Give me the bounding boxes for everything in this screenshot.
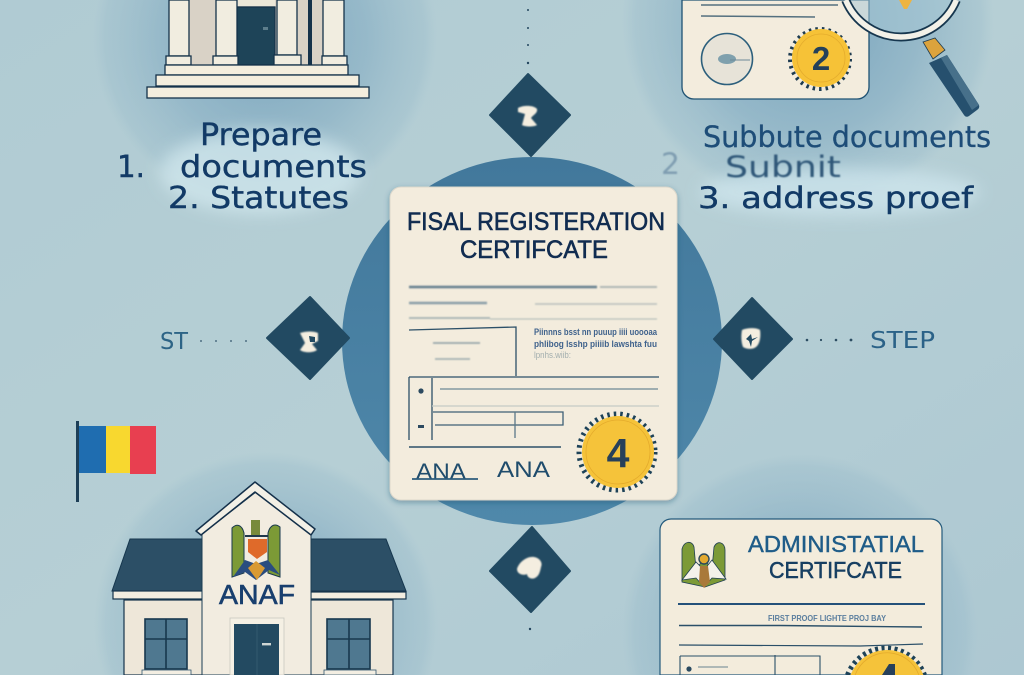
windows bbox=[145, 619, 370, 669]
text: left list bbox=[117, 118, 367, 216]
certificate form bullets bbox=[418, 388, 424, 428]
central gable block bbox=[202, 492, 311, 675]
label: STEP right: STEP bbox=[870, 328, 935, 354]
administrative certificate bbox=[660, 519, 942, 675]
Romanian flag bbox=[76, 421, 156, 502]
emblem bbox=[682, 542, 726, 588]
bottom connector dot bbox=[529, 628, 531, 630]
label: ST left: ST bbox=[160, 329, 189, 355]
courthouse illustration bbox=[147, 0, 369, 98]
certificate body lines bbox=[409, 287, 657, 359]
text: right list: Subnit bbox=[725, 150, 841, 184]
certificate seal number 4: 4 bbox=[607, 430, 630, 476]
text: left list: Prepare bbox=[200, 118, 322, 153]
title: CERTIFCATE bbox=[769, 557, 902, 583]
certificate title: FISAL REGISTERATION bbox=[407, 208, 665, 236]
gable roof bbox=[196, 482, 315, 535]
window sills bbox=[142, 670, 376, 675]
certificate title bbox=[407, 208, 665, 264]
diamond: right bbox=[714, 298, 792, 379]
title bbox=[748, 531, 924, 583]
form bullet bbox=[686, 666, 692, 672]
certificate fine print: Piinnns bsst nn puuup iiii uoooaa bbox=[534, 327, 658, 337]
rule bbox=[678, 603, 925, 605]
seal number 2 bbox=[790, 29, 850, 89]
seal number 2: 2 bbox=[812, 40, 830, 77]
halo: administrative certificate bbox=[622, 454, 978, 675]
diamond: top bbox=[490, 74, 570, 156]
diamond: left bbox=[267, 297, 349, 379]
text: left list: documents bbox=[180, 150, 367, 185]
side walls bbox=[124, 600, 393, 675]
top connector dots bbox=[527, 9, 529, 64]
certificate card bbox=[390, 187, 677, 500]
certificate signatures: ANA bbox=[416, 459, 466, 484]
certificate fine print: phlibog lsshp piiiib lawshta fuu bbox=[534, 339, 657, 349]
text glow: right list bbox=[700, 168, 980, 216]
document card bbox=[682, 0, 869, 99]
text: right list bbox=[661, 120, 991, 215]
diamond: bottom bbox=[490, 527, 570, 612]
text: right list: Subbute documents bbox=[703, 120, 991, 154]
halo: ANAF office bbox=[94, 452, 438, 675]
text glow: left list bbox=[160, 130, 360, 214]
certificate signatures: ANA bbox=[497, 457, 550, 482]
label: ST left bbox=[160, 329, 247, 355]
halo: document review bbox=[622, 0, 994, 208]
magnifier bbox=[846, 0, 979, 117]
body lines bbox=[679, 626, 923, 675]
text: left list: 2. Statutes bbox=[168, 181, 349, 216]
central disc bbox=[342, 157, 722, 525]
roofs bbox=[112, 539, 406, 591]
central certificate bbox=[390, 187, 677, 500]
text: left list: 1. bbox=[117, 150, 145, 185]
ANAF sign: ANAF bbox=[219, 579, 295, 610]
roof eaves bbox=[113, 591, 406, 599]
courthouse wall bbox=[180, 0, 335, 66]
certificate title: CERTIFCATE bbox=[460, 236, 608, 264]
certificate fine print bbox=[534, 327, 658, 360]
courthouse columns bbox=[166, 0, 347, 65]
title: ADMINISTATIAL bbox=[748, 531, 924, 557]
ANAF office building bbox=[112, 482, 406, 675]
certificate seal number 4 bbox=[579, 414, 655, 490]
courthouse door bbox=[237, 7, 275, 65]
courthouse lintel bbox=[237, 0, 275, 6]
seal top bbox=[848, 648, 924, 675]
fine print: FIRST PROOF LIGHTE PROJ BAY bbox=[768, 614, 887, 623]
entrance door bbox=[230, 618, 284, 675]
stamp outline bbox=[702, 34, 752, 84]
courthouse steps bbox=[147, 65, 369, 98]
text: right list: 2 bbox=[661, 147, 680, 181]
certificate fine print: lpnhs.wiib: bbox=[534, 350, 571, 360]
coat of arms bbox=[232, 520, 280, 580]
certificate signatures bbox=[412, 457, 550, 484]
halo: courthouse bbox=[93, 0, 437, 210]
card bbox=[660, 519, 942, 675]
document review illustration bbox=[682, 0, 979, 117]
text: right list: 3. address proef bbox=[698, 181, 974, 215]
document lines bbox=[701, 5, 838, 17]
label: STEP right bbox=[806, 328, 935, 354]
certificate form box bbox=[409, 327, 659, 447]
